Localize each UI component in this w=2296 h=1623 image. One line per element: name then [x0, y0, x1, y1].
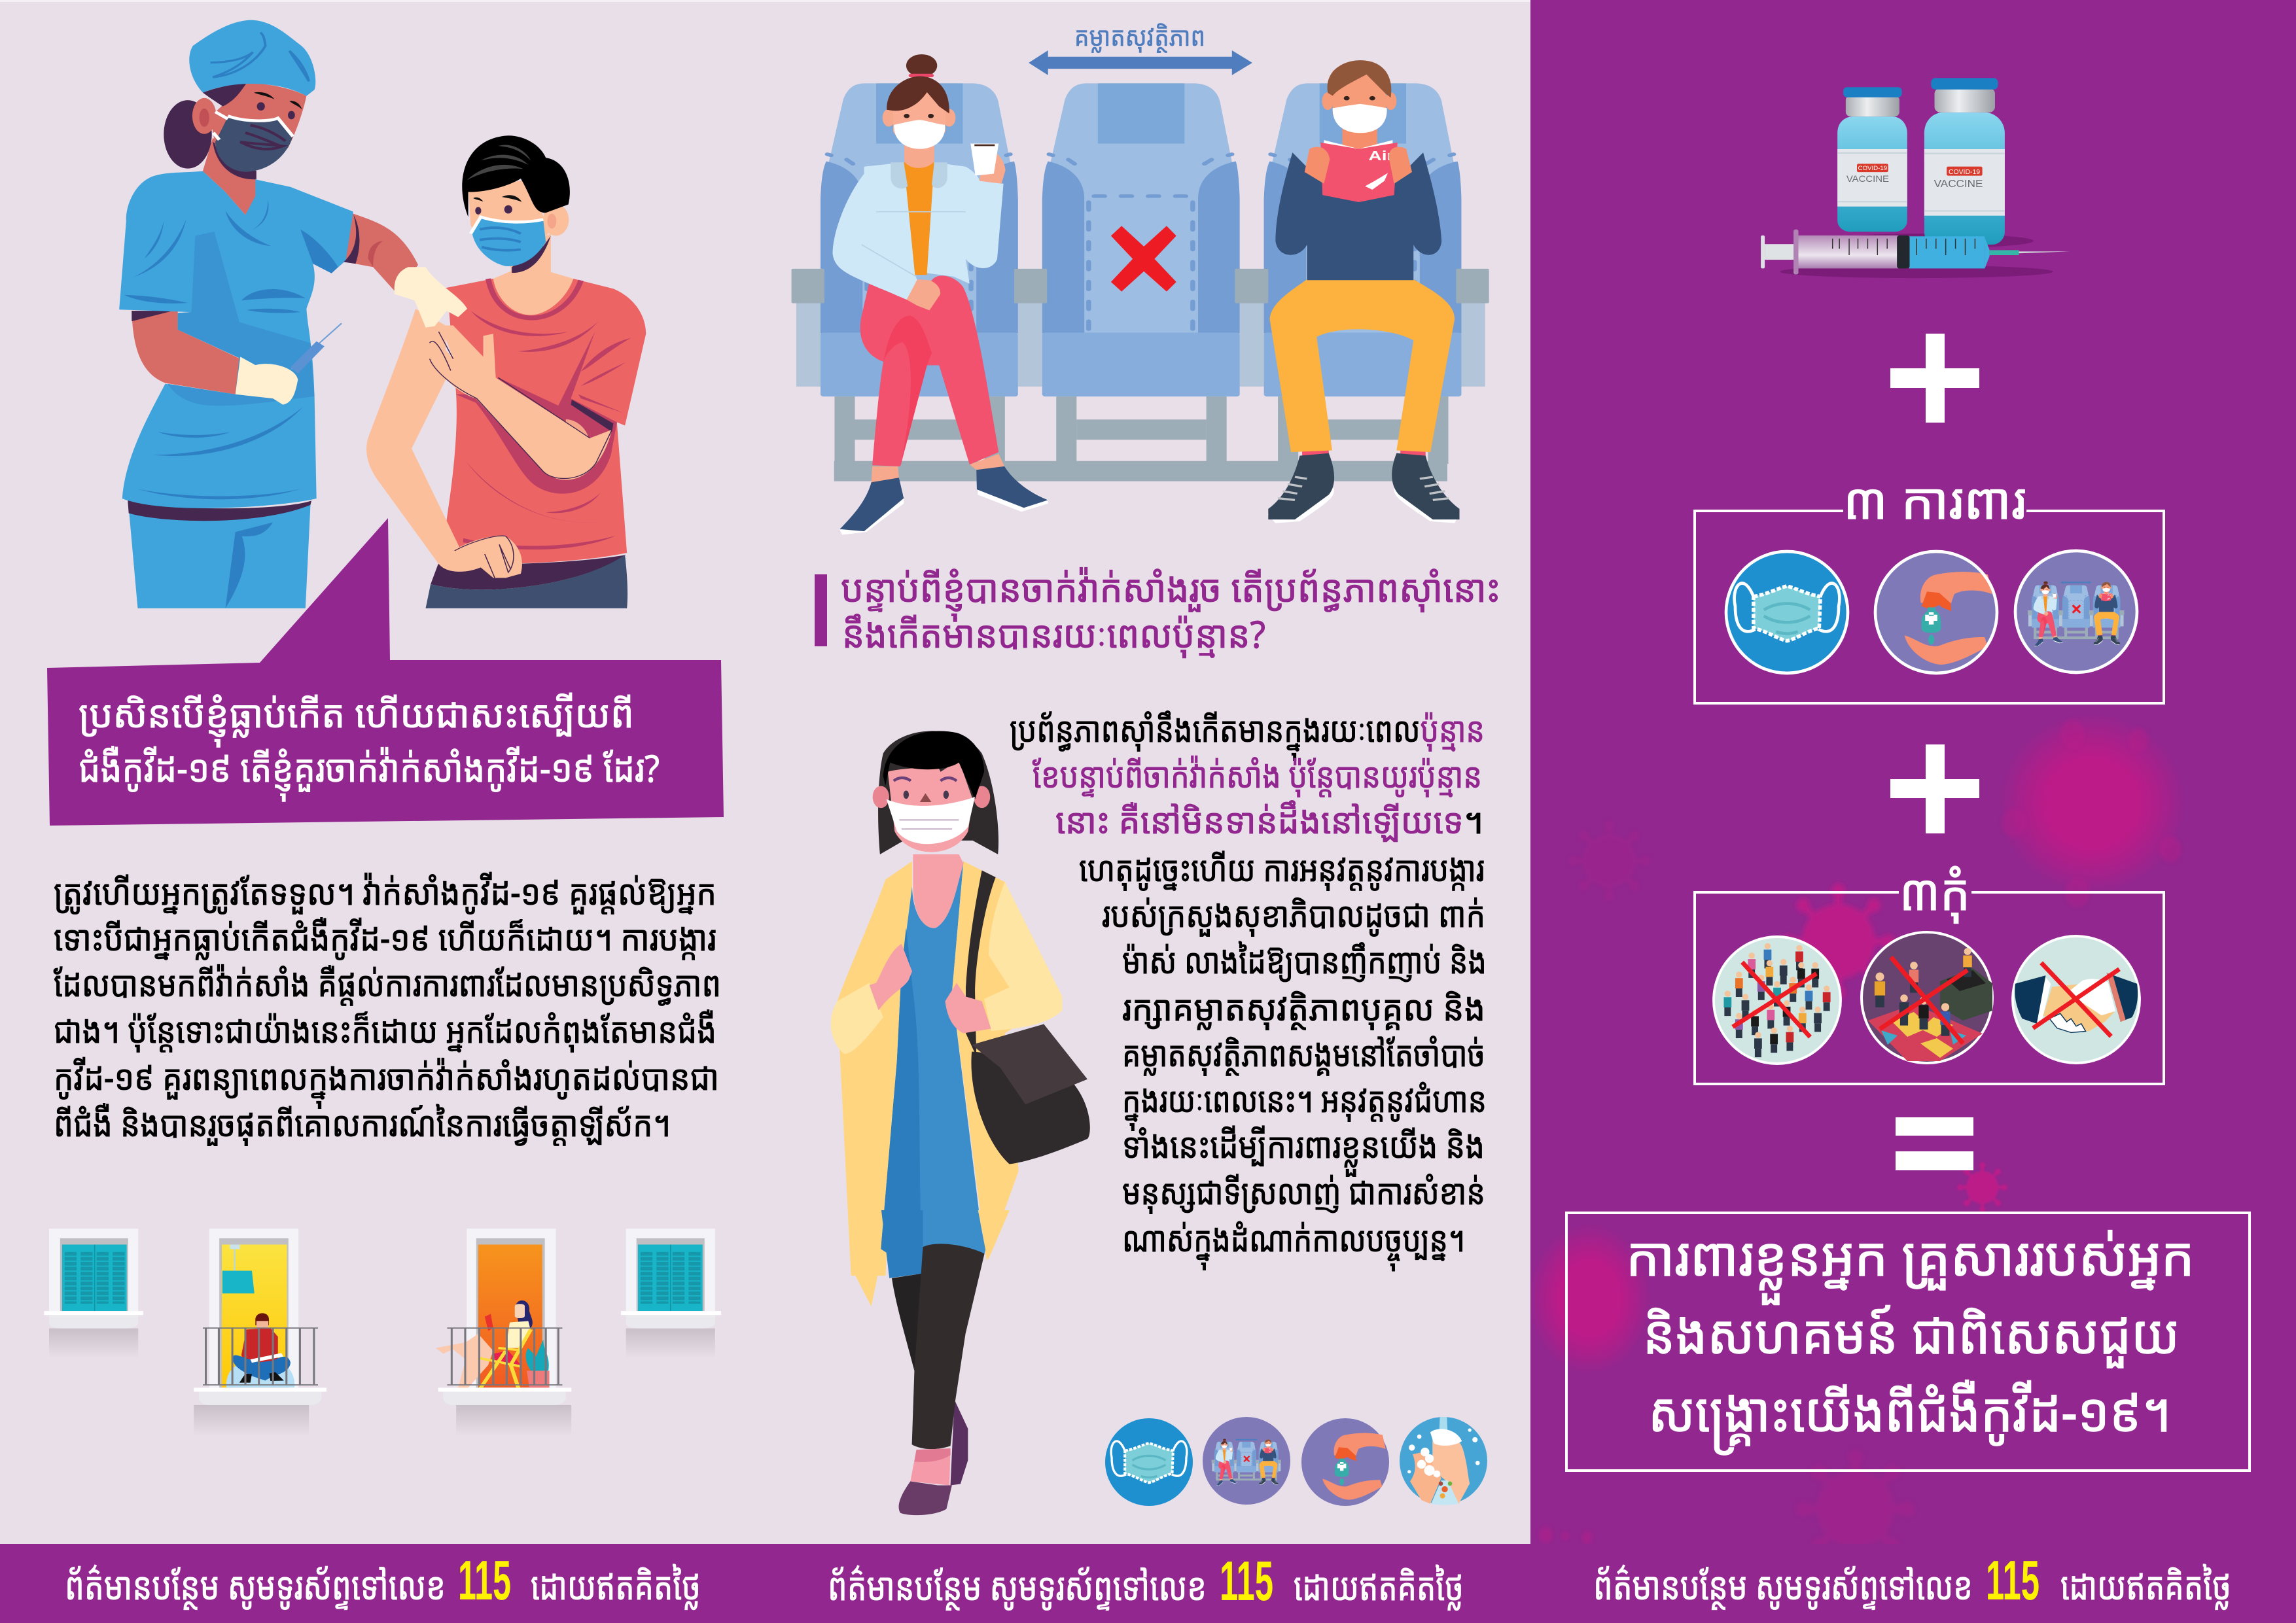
- icon: seat distancing: [1203, 1417, 1290, 1505]
- text block: immunity explanation and protective measures: ទាំងនេះដើម្បីការពារខ្លួនយើង និង: [1122, 1121, 1485, 1177]
- final message text: និងសហគមន៍ ជាពិសេសជួយ: [1643, 1297, 2180, 1370]
- icon: hand sanitizer: [1301, 1418, 1389, 1506]
- small vial: [1837, 87, 1907, 232]
- footer text: right: ដោយឥតគិតថ្លៃ: [2060, 1559, 2231, 1611]
- footer text: centre: [828, 1550, 1464, 1613]
- heading: how long does immunity last: នឹងកើតមានបានរយៈពេលប៉ុន្មាន?: [842, 608, 1265, 659]
- balcony with man reading: [194, 1229, 327, 1437]
- plus sign one: [1890, 334, 1979, 423]
- text block: immunity explanation and protective measures: ណាស់ក្នុងដំណាក់កាលបច្ចុប្បន្ន។: [1122, 1214, 1465, 1271]
- footer text: centre: 115: [1220, 1550, 1273, 1613]
- heading: how long does immunity last: បន្ទាប់ពីខ្ញុំបានចាក់វ៉ាក់សាំងរួច តើប្រព័ន្ធភាពស៊ាំនោះ: [841, 562, 1500, 621]
- box: three do-nots: [1695, 858, 2164, 1084]
- footer text: centre: ព័ត៌មានបន្ថែម សូមទូរស័ព្ទទៅលេខ: [828, 1560, 1207, 1611]
- text block: immunity explanation and protective measures: [1010, 705, 1487, 1271]
- callout panel: question about vaccination after infection: [47, 518, 724, 826]
- icon: hand sanitizer: [1875, 551, 1997, 673]
- illustration: passengers on seats with safe distance: [792, 50, 1489, 534]
- text block: immunity explanation and protective measures: ក្នុងរយៈពេលនេះ។ អនុវត្តនូវជំហាន: [1122, 1075, 1487, 1130]
- icon: no handshakes: [2013, 936, 2140, 1063]
- text block: answer about vaccination after infection: ពីជំងឺ និងបានរួចផុតពីគោលការណ៍នៃការធ្វើចត្តាឡីស័ក។: [54, 1099, 671, 1147]
- footer text: left: [65, 1550, 701, 1612]
- box title: three do-nots: ៣កុំ: [1899, 858, 1970, 925]
- footer text: right: [1593, 1550, 2231, 1612]
- final message text: [1626, 1219, 2195, 1456]
- heading: how long does immunity last: [815, 562, 1500, 659]
- plus sign two: [1890, 744, 1979, 833]
- text block: immunity explanation and protective measures: នោះ គឺនៅមិនទាន់ដឹងនៅឡើយទេ។: [1055, 796, 1483, 844]
- icon: washing hands: [1400, 1417, 1487, 1505]
- footer bar: [0, 1544, 2296, 1623]
- syringe: [1761, 230, 2070, 274]
- right window: [621, 1229, 721, 1358]
- text block: immunity explanation and protective measures: របស់ក្រសួងសុខាភិបាលដូចជា ពាក់: [1102, 890, 1485, 937]
- nurse gloved hand on shoulder: [395, 267, 467, 328]
- text block: immunity explanation and protective measures: ហេតុដូច្នេះហើយ ការអនុវត្តនូវការបង្ការ: [1079, 844, 1485, 892]
- nurse: [119, 20, 418, 608]
- icon: no gatherings or parties: [1862, 932, 1992, 1063]
- icon: seat distancing: [2015, 551, 2137, 672]
- text block: immunity explanation and protective measures: មនុស្សជាទីស្រលាញ់ ជាការសំខាន់: [1122, 1167, 1485, 1215]
- box title: three protections: ៣ ការពារ: [1843, 466, 2026, 534]
- small vial: COVID-19: [1858, 165, 1887, 171]
- illustration: windows and balconies: [44, 1229, 721, 1437]
- callout question text: ប្រសិនបើខ្ញុំធ្លាប់កើត ហើយជាសះស្បើយពី: [79, 688, 634, 747]
- text block: immunity explanation and protective measures: ម៉ាស់ លាងដៃឱ្យបានញឹកញាប់ និង: [1122, 936, 1487, 984]
- icon: mask: [1105, 1418, 1193, 1506]
- illustration: woman with mask and bag: [831, 731, 1090, 1515]
- box: final message: [1566, 1213, 2250, 1471]
- footer text: left: ព័ត៌មានបន្ថែម សូមទូរស័ព្ទទៅលេខ: [65, 1559, 446, 1611]
- illustration: nurse vaccinating a patient: [119, 20, 646, 608]
- equals sign: [1896, 1117, 1973, 1170]
- balcony with woman reading: [436, 1229, 571, 1437]
- text block: answer about vaccination after infection: [54, 867, 721, 1147]
- label: safe distance: គម្លាតសុវត្ថិភាព: [1074, 18, 1205, 54]
- callout question text: [79, 688, 660, 801]
- large vial: COVID-19: [1949, 169, 1980, 176]
- box: three protections: [1695, 466, 2164, 703]
- large vial: VACCINE: [1934, 178, 1983, 190]
- icon row: mask, distance, sanitizer, handwashing: [1105, 1417, 1487, 1506]
- text block: answer about vaccination after infection: ដែលបានមកពីវ៉ាក់សាំង គឺផ្តល់ការការពារដែលមានប្រសិទ្ធភាព: [54, 959, 721, 1007]
- decorative virus cells: [1528, 714, 2185, 1568]
- text block: answer about vaccination after infection: ជាង។ ប៉ុន្តែទោះជាយ៉ាងនេះក៏ដោយ អ្នកដែលកំពុងតែមានជំងឺ: [54, 1005, 716, 1053]
- callout question text: ជំងឺកូវីដ-១៩ តើខ្ញុំគួរចាក់វ៉ាក់សាំងកូវីដ-១៩ ដែរ?: [79, 742, 660, 801]
- text block: immunity explanation and protective measures: រក្សាគម្លាតសុវត្ថិភាពបុគ្គល និង: [1122, 983, 1485, 1031]
- text block: answer about vaccination after infection: ទោះបីជាអ្នកធ្លាប់កើតជំងឺកូវីដ-១៩ ហើយក៏ដោយ។ ការបង្ការ: [54, 913, 716, 961]
- text block: answer about vaccination after infection: ត្រូវហើយអ្នកត្រូវតែទទួល។ វ៉ាក់សាំងកូវីដ-១៩ គួរផ្តល់ឱ្យអ្នក: [54, 867, 716, 915]
- left window: [44, 1229, 143, 1358]
- icon: mask: [1726, 551, 1848, 673]
- text block: immunity explanation and protective measures: ខែបន្ទាប់ពីចាក់វ៉ាក់សាំង ប៉ុន្តែបានយូរប៉ុន្មាន: [1033, 750, 1482, 798]
- illustration: vaccine vials and syringe: [1761, 78, 2070, 278]
- icon: no crowds: [1714, 937, 1841, 1064]
- final message text: ការពារខ្លួនអ្នក គ្រួសាររបស់អ្នក: [1626, 1219, 2195, 1304]
- small vial: VACCINE: [1846, 174, 1889, 184]
- final message text: សង្គ្រោះយើងពីជំងឺកូវីដ-១៩។: [1648, 1374, 2171, 1456]
- footer text: right: ព័ត៌មានបន្ថែម សូមទូរស័ព្ទទៅលេខ: [1593, 1559, 1973, 1611]
- large vial: [1924, 78, 2005, 245]
- footer text: centre: ដោយឥតគិតថ្លៃ: [1294, 1560, 1464, 1611]
- text block: answer about vaccination after infection: កូវីដ-១៩ គួរពន្យាពេលក្នុងការចាក់វ៉ាក់សាំងរហូតដល់បានជា: [54, 1053, 719, 1108]
- panel: right purple column: [1530, 0, 2296, 1623]
- text block: immunity explanation and protective measures: ប្រព័ន្ធភាពស៊ាំនឹងកើតមានក្នុងរយៈពេលប៉ុន្មាន: [1010, 705, 1485, 760]
- footer text: left: 115: [458, 1550, 511, 1612]
- footer text: left: ដោយឥតគិតថ្លៃ: [531, 1559, 701, 1611]
- footer text: right: 115: [1986, 1550, 2040, 1612]
- text block: immunity explanation and protective measures: គម្លាតសុវត្ថិភាពសង្គមនៅតែចាំបាច់: [1122, 1029, 1485, 1077]
- patient: [366, 135, 646, 608]
